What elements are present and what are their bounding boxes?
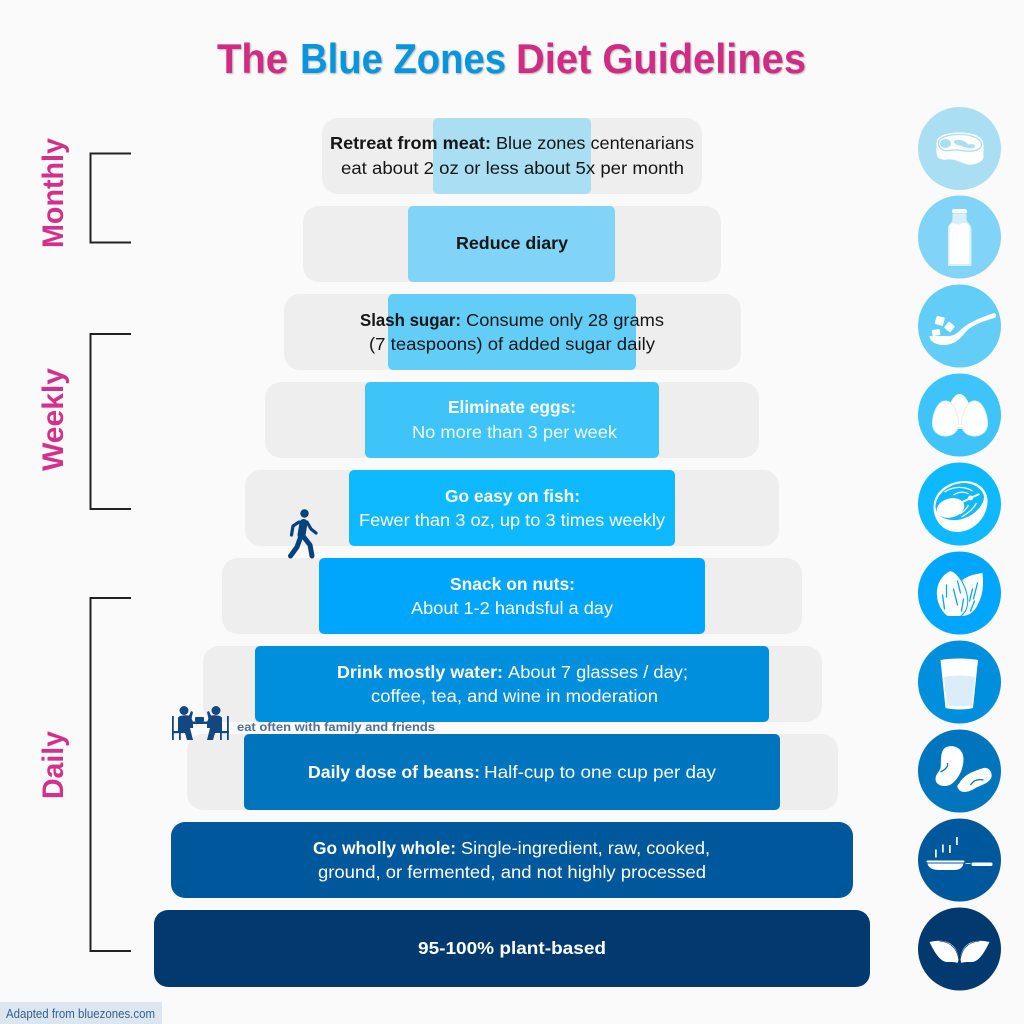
- icon: glass of water: [918, 640, 1001, 724]
- icon: fish steak: [918, 462, 1001, 546]
- panel: sugar tier: (7 teaspoons) of added sugar daily: [369, 334, 655, 354]
- icon: spoon with sugar: [918, 284, 1001, 368]
- panel: dairy tier: Reduce diary: [456, 233, 568, 253]
- bracket: Daily: [90, 598, 131, 951]
- panel: nuts tier: Snack on nuts:: [450, 574, 575, 594]
- panel: nuts tier: [222, 558, 802, 634]
- panel: dairy tier: [303, 206, 721, 282]
- panel: fish tier: [245, 470, 779, 546]
- panel: sugar tier: [284, 294, 741, 370]
- icon: milk bottle: [918, 196, 1001, 278]
- panel: nuts tier: About 1-2 handsful a day: [411, 598, 613, 618]
- panel: eggs tier: [265, 382, 759, 458]
- panel: water tier: coffee, tea, and wine in moderation: [371, 686, 658, 706]
- panel: sugar tier: Consume only 28 grams: [466, 310, 664, 330]
- panel: whole foods tier: [171, 822, 853, 898]
- panel: sugar tier: Slash sugar:: [360, 310, 461, 330]
- bracket: Monthly: [90, 154, 131, 242]
- icon: walking person: [290, 509, 316, 556]
- icon: almonds: [918, 552, 1001, 634]
- panel: meat tier: Blue zones centenarians: [496, 133, 694, 153]
- panel: water tier: [203, 646, 822, 722]
- icon: eggs: [918, 374, 1001, 456]
- icon: family at table: [172, 706, 229, 740]
- label: Weekly: Weekly: [37, 368, 70, 471]
- title: Diet Guidelines: [516, 35, 806, 82]
- title: Blue Zones: [300, 35, 506, 82]
- panel: water tier: Drink mostly water:: [337, 662, 503, 682]
- icon: frying pan: [918, 818, 1001, 902]
- footer: source credit: Adapted from bluezones.com: [6, 1006, 155, 1021]
- panel: fish tier: Go easy on fish:: [445, 486, 580, 506]
- panel: eggs tier: No more than 3 per week: [412, 422, 617, 442]
- panel: whole foods tier: Go wholly whole:: [313, 838, 456, 858]
- panel: eggs tier: Eliminate eggs:: [448, 397, 576, 417]
- panel: meat tier: eat about 2 oz or less about 5x per month: [341, 158, 684, 178]
- bracket: Weekly: [90, 334, 131, 509]
- label: Monthly: Monthly: [37, 138, 70, 248]
- title: The: [217, 35, 288, 82]
- panel: whole foods tier: Single-ingredient, raw, cooked,: [461, 838, 710, 858]
- panel: beans tier: Daily dose of beans:: [308, 762, 480, 782]
- label: Daily: Daily: [37, 731, 70, 799]
- panel: beans tier: Half-cup to one cup per day: [484, 762, 716, 782]
- icon: leaves: [918, 908, 1001, 990]
- footer: source credit: [0, 1002, 162, 1024]
- panel: water tier: About 7 glasses / day;: [508, 662, 688, 682]
- panel: meat tier: Retreat from meat:: [330, 133, 491, 153]
- panel: plant-based tier: 95-100% plant-based: [418, 938, 606, 958]
- panel: fish tier: Fewer than 3 oz, up to 3 times weekly: [359, 510, 665, 530]
- panel: plant-based tier: [154, 910, 870, 987]
- icon: meat: [918, 107, 1001, 190]
- icon: beans: [918, 730, 1001, 812]
- title: [217, 35, 806, 82]
- panel: meat tier: [322, 118, 702, 194]
- panel: beans tier: [187, 734, 838, 810]
- caption: eat often with family and friends: eat often with family and friends: [237, 722, 435, 734]
- panel: whole foods tier: ground, or fermented, and not highly processed: [318, 862, 706, 882]
